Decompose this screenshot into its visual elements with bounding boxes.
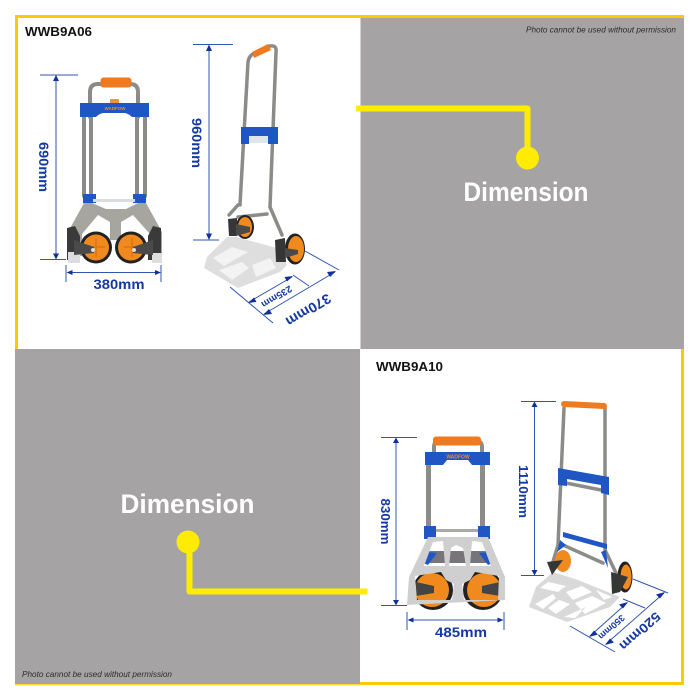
model label top: WWB9A06 — [25, 25, 92, 39]
dimension: 380mm — [66, 265, 161, 292]
dimension: 235mm — [230, 275, 309, 323]
caption bottom left: Photo cannot be used without permission — [22, 669, 172, 679]
connector top — [356, 108, 539, 170]
connector bottom — [176, 530, 368, 592]
frame: top and left border — [16, 16, 684, 349]
dimension: 485mm — [407, 612, 504, 640]
trolley: WWB9A06 front view: WADFOW — [104, 106, 126, 111]
model label bottom: WWB9A10 — [376, 360, 443, 374]
dimension: 520mm: 520mm — [616, 609, 664, 654]
dimension: 370mm — [263, 251, 339, 330]
frame: bottom left border — [15, 684, 360, 686]
dimension: 690mm: 690mm — [36, 142, 52, 192]
dimension: 1110mm — [516, 402, 556, 576]
trolley: WWB9A06 side view — [204, 44, 305, 288]
panel: top right grey — [360, 18, 684, 349]
frame: bottom and right border — [360, 349, 682, 684]
dimension: 485mm: 485mm — [435, 624, 487, 640]
trolley: WWB9A10 front view — [407, 436, 505, 610]
panel: bottom left grey — [15, 349, 360, 684]
dimension: 960mm — [189, 44, 233, 240]
dimension: 960mm: 960mm — [189, 118, 205, 168]
dimension: 370mm: 370mm — [283, 291, 334, 330]
trolley: WWB9A10 side view — [529, 404, 632, 622]
caption top right: Photo cannot be used without permission — [526, 24, 676, 34]
dimension: 830mm: 830mm — [378, 498, 392, 544]
dimension: 520mm — [605, 579, 668, 654]
dimension: 380mm: 380mm — [94, 276, 144, 292]
dimension: 235mm: 235mm — [259, 283, 294, 310]
dimension: 350mm: 350mm — [596, 613, 627, 642]
trolley: WWB9A06 front view — [67, 78, 162, 264]
dimension: 690mm — [36, 75, 78, 260]
dimension: 830mm — [378, 438, 417, 606]
heading top: Dimension — [464, 177, 588, 207]
trolley: WWB9A10 front view: WADFOW — [446, 454, 470, 460]
heading bottom: Dimension — [120, 489, 254, 519]
dimension: 350mm — [570, 599, 645, 652]
dimension: 1110mm: 1110mm — [516, 465, 531, 518]
